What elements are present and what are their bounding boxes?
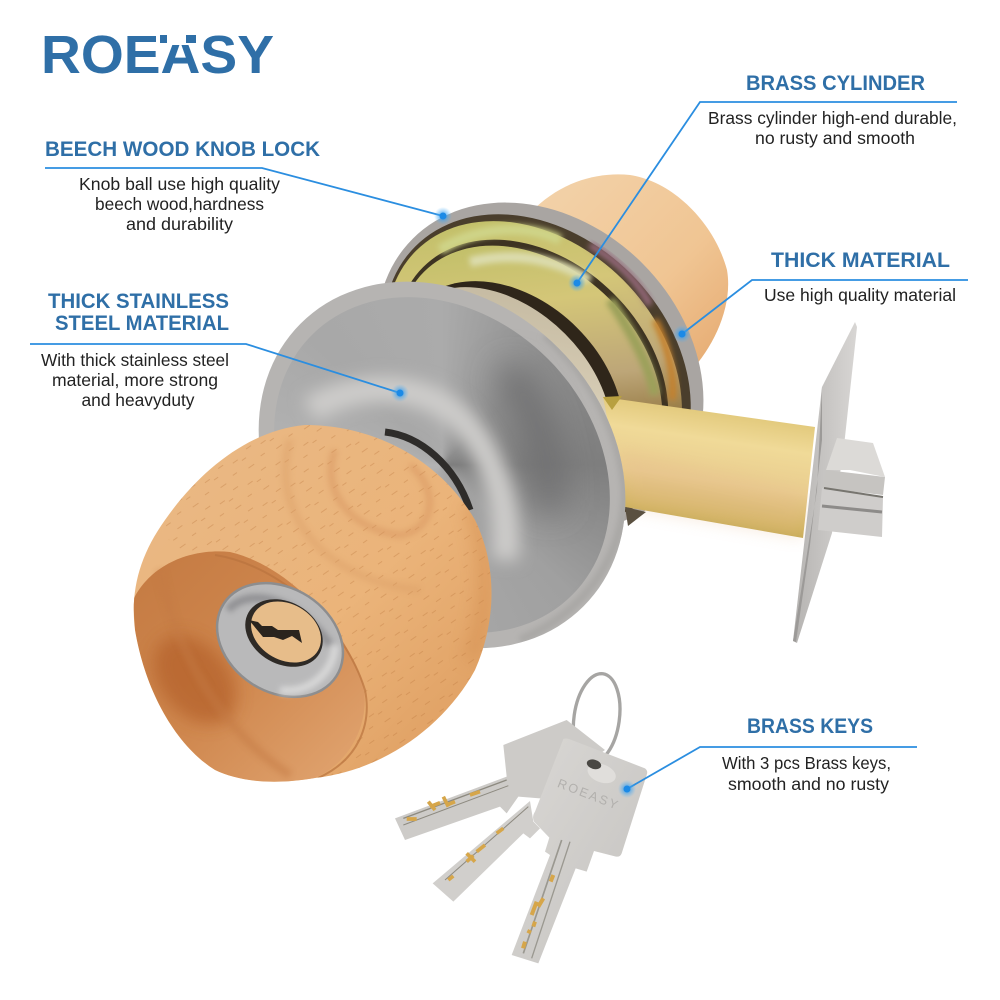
callout: beech wood knob lock bbox=[45, 138, 452, 234]
key hole bbox=[585, 760, 619, 787]
back wooden knob bbox=[535, 174, 728, 372]
leader line bbox=[682, 280, 968, 334]
description: smooth and no rusty bbox=[728, 774, 889, 794]
heading: BEECH WOOD KNOB LOCK bbox=[45, 138, 320, 161]
heading: STEEL MATERIAL bbox=[55, 312, 229, 335]
heading: THICK STAINLESS bbox=[48, 290, 229, 313]
marker dot bbox=[618, 780, 636, 798]
heading bbox=[48, 290, 229, 335]
leader line bbox=[627, 747, 917, 789]
front key: ROEASY bbox=[556, 776, 620, 812]
latch bolt bbox=[818, 438, 885, 537]
outer rim shading bbox=[520, 335, 625, 640]
callout: thick stainless steel material bbox=[30, 290, 409, 410]
description: Brass cylinder high-end durable, bbox=[708, 108, 957, 128]
dark gap around the knob bbox=[385, 432, 470, 510]
cream neck of the latch bbox=[357, 246, 653, 542]
knob front face bbox=[133, 551, 365, 782]
heading: THICK MATERIAL bbox=[771, 249, 950, 272]
leader line bbox=[577, 102, 957, 283]
description: Knob ball use high quality bbox=[79, 174, 280, 194]
description: no rusty and smooth bbox=[755, 128, 915, 148]
description: beech wood,hardness bbox=[95, 194, 264, 214]
front steel rose bbox=[258, 282, 626, 648]
callout: thick material bbox=[673, 249, 968, 343]
front wooden knob bbox=[133, 425, 492, 782]
keys bbox=[395, 671, 647, 963]
heading: BRASS KEYS bbox=[747, 715, 873, 738]
back rose ring with brass rings bbox=[384, 202, 704, 521]
marker dot bbox=[391, 384, 409, 402]
description: and durability bbox=[126, 214, 233, 234]
logo: ROEASY: ROEASY bbox=[41, 25, 274, 85]
marker dot bbox=[568, 274, 586, 292]
description: With 3 pcs Brass keys, bbox=[722, 753, 891, 773]
keyway bbox=[249, 620, 302, 643]
description: and heavyduty bbox=[82, 390, 195, 410]
latch tube bbox=[603, 396, 815, 538]
callout: brass keys bbox=[618, 715, 917, 798]
leader line bbox=[45, 168, 443, 216]
heading: BRASS CYLINDER bbox=[746, 72, 925, 95]
key ring bbox=[568, 671, 625, 766]
description bbox=[41, 350, 229, 410]
middle key bbox=[433, 801, 540, 902]
front key bbox=[512, 739, 647, 963]
wood rings bbox=[331, 450, 430, 535]
marker dot bbox=[434, 207, 452, 225]
description bbox=[708, 108, 957, 148]
hub bbox=[310, 389, 506, 560]
callout: brass cylinder bbox=[568, 72, 957, 292]
description bbox=[722, 753, 891, 794]
key cylinder escutcheon bbox=[195, 560, 365, 720]
description bbox=[79, 174, 280, 234]
description: material, more strong bbox=[52, 370, 218, 390]
left key bbox=[395, 720, 605, 840]
brass plug bbox=[233, 586, 335, 680]
leader line bbox=[30, 344, 400, 393]
description: With thick stainless steel bbox=[41, 350, 229, 370]
marker dot bbox=[673, 325, 691, 343]
description: Use high quality material bbox=[764, 285, 956, 305]
latch plate bbox=[793, 322, 857, 643]
